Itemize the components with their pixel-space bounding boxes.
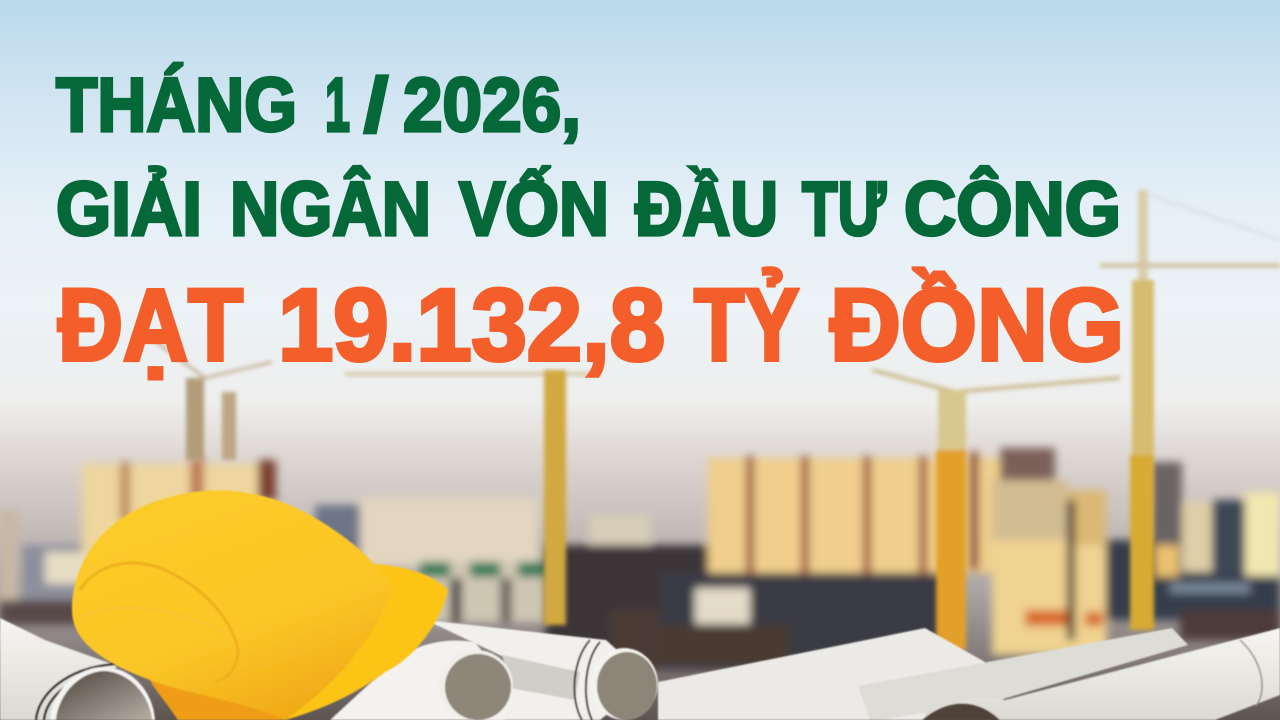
title: line 2 <box>56 166 1121 252</box>
title: line 2: GIẢI <box>56 167 202 252</box>
title: line 2: NGÂN <box>230 166 431 252</box>
image: yellow safety helmet <box>72 490 448 720</box>
background: orange tower block <box>708 452 1000 574</box>
image: rolled blueprint left <box>0 618 155 720</box>
title: highlighted amount: ĐẠT <box>58 268 243 382</box>
title: line 2: TƯ <box>802 167 887 252</box>
title: line 2: ĐẦU <box>635 167 778 252</box>
title: line 1: THÁNG <box>56 63 297 148</box>
title: highlighted amount: TỶ <box>694 268 799 382</box>
title: line 2: VỐN <box>459 167 609 252</box>
title: line 1: 1 <box>325 63 350 148</box>
title: highlighted amount: 19.132,8 <box>278 268 665 382</box>
image: rolled blueprints right <box>658 628 1280 720</box>
title: line 2: CÔNG <box>904 167 1121 252</box>
image: rolled blueprint back right <box>426 620 658 720</box>
background: blurred city skyline <box>0 448 1280 670</box>
title: highlighted amount <box>58 268 1124 382</box>
title: line 1 <box>56 63 581 148</box>
title: line 1: 2026, <box>403 63 581 148</box>
title: line 1: / <box>364 63 388 148</box>
title: highlighted amount: ĐỒNG <box>830 268 1124 382</box>
image: rolled blueprint middle <box>330 640 513 720</box>
background: blurred tower cranes <box>140 190 1280 650</box>
